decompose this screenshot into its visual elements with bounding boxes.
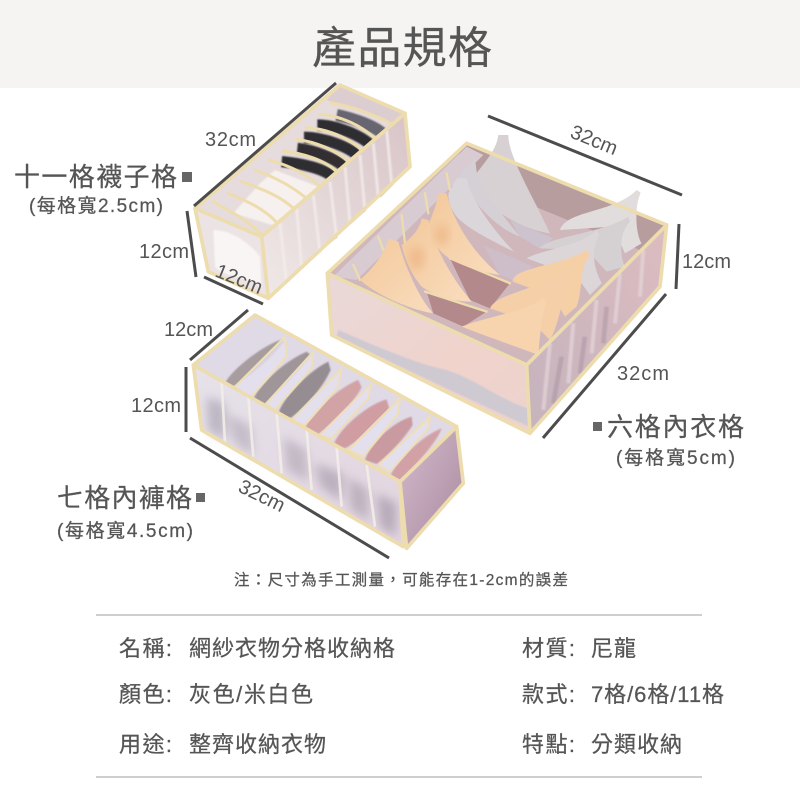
dimensions: bra organizer: 32cm xyxy=(567,121,621,160)
bras: grey row xyxy=(448,135,642,295)
dimensions: sock organizer: 12cm xyxy=(212,260,266,299)
dimensions: underwear organizer: 12cm xyxy=(131,395,181,417)
specification table: 分類收納 xyxy=(591,732,682,757)
specification table: 名稱: xyxy=(119,636,172,661)
bras: peach row xyxy=(360,193,590,355)
dimensions: bra organizer: 12cm xyxy=(682,251,731,273)
callout: seven-grid underwear: 七格內褲格 xyxy=(57,483,192,513)
specification table: 特點: xyxy=(522,732,575,757)
folded socks xyxy=(225,339,442,482)
product: seven-grid underwear organizer xyxy=(193,315,463,548)
callout: eleven-grid socks: (每格寬2.5cm) xyxy=(29,195,163,217)
dimensions: underwear organizer xyxy=(131,310,389,558)
callout: six-grid bras xyxy=(593,412,744,469)
product: six-grid bra organizer xyxy=(327,135,667,433)
dimensions: underwear organizer: 32cm xyxy=(235,476,288,517)
specification table: 用途: xyxy=(119,732,172,757)
callout: six-grid bras: (每格寬5cm) xyxy=(616,447,735,469)
title banner: 產品規格 xyxy=(312,24,492,73)
specification table: 7格/6格/11格 xyxy=(591,682,724,707)
dimensions: sock organizer xyxy=(139,83,336,304)
specification table: 顏色: xyxy=(119,682,172,707)
specification table: 網紗衣物分格收納格 xyxy=(189,636,395,661)
callout: eleven-grid socks: 十一格襪子格 xyxy=(14,162,177,192)
dimensions: sock organizer: 12cm xyxy=(139,241,189,263)
specification table: 款式: xyxy=(522,682,575,707)
specification table: 整齊收納衣物 xyxy=(189,732,326,757)
measurement note: 注：尺寸為手工測量，可能存在1-2cm的誤差 xyxy=(234,571,568,589)
product: eleven-grid sock organizer xyxy=(195,85,410,298)
specification table xyxy=(96,615,724,777)
title banner xyxy=(0,0,800,88)
socks xyxy=(233,115,384,227)
specification table: 尼龍 xyxy=(591,636,636,661)
callout: seven-grid underwear xyxy=(57,483,205,542)
mesh dividers xyxy=(233,337,430,472)
specification table: 灰色/米白色 xyxy=(189,682,313,707)
dimensions: bra organizer xyxy=(488,116,731,438)
specification table: 材質: xyxy=(522,636,575,661)
dimensions: sock organizer: 32cm xyxy=(205,129,256,151)
callout: eleven-grid socks xyxy=(14,162,192,217)
dimensions: underwear organizer: 12cm xyxy=(164,319,213,341)
dimensions: bra organizer: 32cm xyxy=(617,363,669,385)
divider bands xyxy=(213,103,393,235)
callout: six-grid bras: 六格內衣格 xyxy=(607,412,744,442)
callout: seven-grid underwear: (每格寬4.5cm) xyxy=(57,520,193,542)
